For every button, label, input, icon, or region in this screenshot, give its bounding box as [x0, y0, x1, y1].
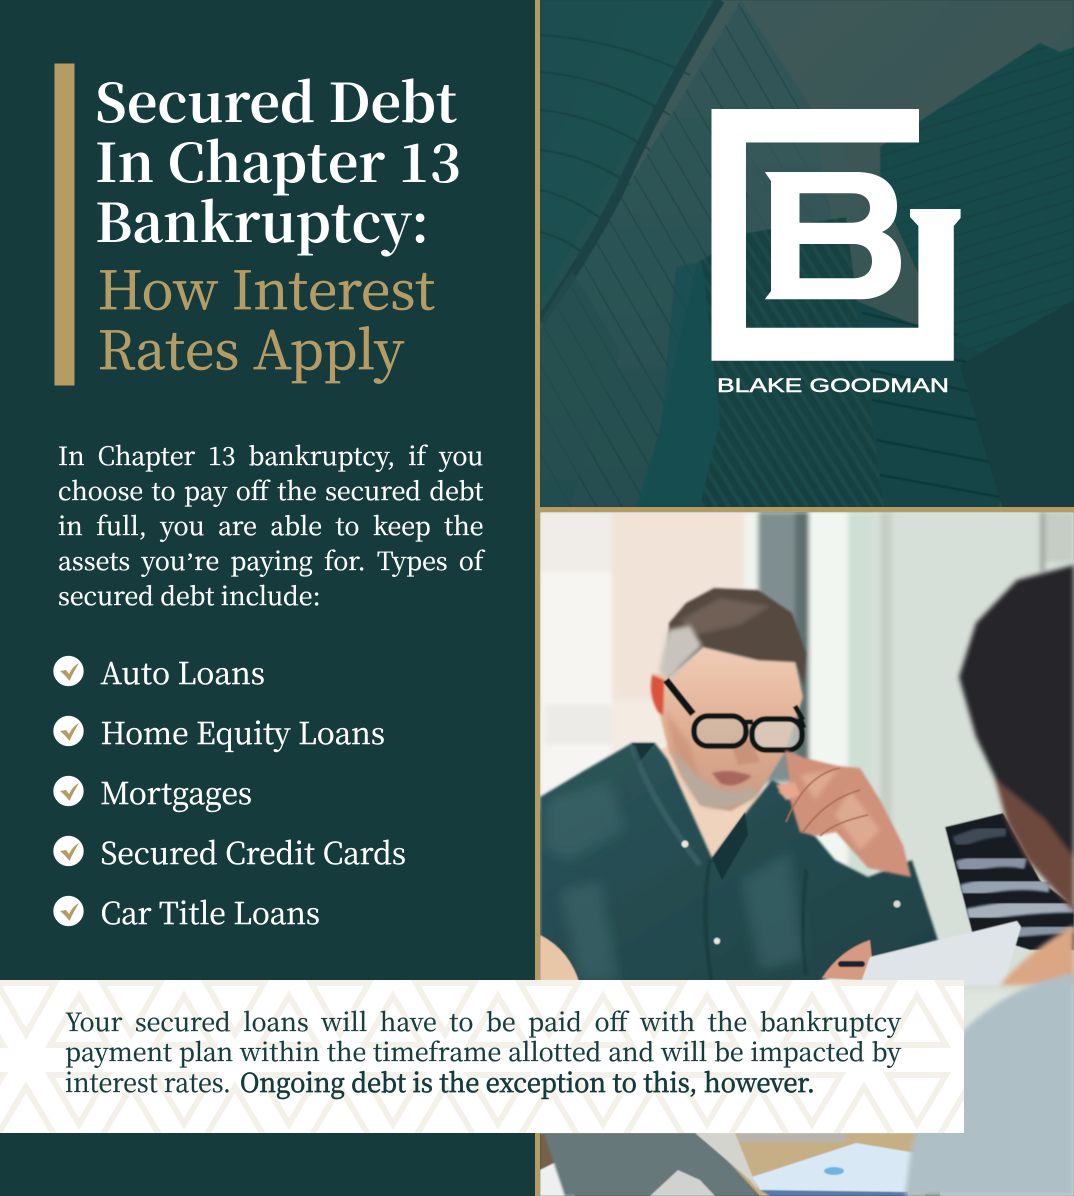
intro paragraph: in full, you are able to keep the — [58, 507, 484, 543]
banner last line: Ongoing debt is the exception to this, however. — [240, 1063, 815, 1100]
gold divider lines — [535, 0, 1074, 1196]
panel: white banner with triangle pattern — [0, 980, 997, 1136]
photo: person seen from behind — [959, 565, 1074, 912]
panel: left background — [0, 0, 535, 1196]
panel: office photo of man at meeting — [540, 512, 1074, 1196]
intro paragraph: assets you’re paying for. Types of — [58, 542, 484, 578]
man's hair — [668, 588, 806, 686]
subtitle: Rates Apply — [98, 309, 405, 385]
intro paragraph: secured debt include: — [58, 577, 321, 613]
man's glasses — [666, 680, 804, 750]
intro paragraph — [58, 437, 486, 613]
gold title bar — [54, 64, 74, 386]
photo: desk items — [540, 1133, 940, 1196]
banner last line: interest rates. — [65, 1063, 231, 1100]
item: mortgages: Mortgages — [100, 769, 252, 813]
title: Secured Debt — [95, 62, 457, 138]
title: Bankruptcy: — [95, 182, 429, 258]
man's shirt — [540, 743, 938, 985]
photo: person's shoulder — [905, 973, 1074, 1196]
photo: seated man — [540, 588, 938, 985]
item: auto loans: Auto Loans — [100, 649, 265, 693]
photo: chair — [945, 813, 1074, 950]
banner paragraph: payment plan within the timeframe allotted and will be impacted by — [65, 1033, 901, 1069]
intro paragraph: choose to pay off the secured debt — [58, 472, 484, 508]
banner paragraph: Your secured loans will have to be paid off with the bankruptcy — [65, 1003, 901, 1039]
logo wordmark: BLAKE GOODMAN — [717, 376, 949, 397]
item: home equity loans: Home Equity Loans — [100, 709, 385, 753]
subtitle: How Interest — [98, 249, 435, 325]
man's face — [652, 647, 803, 811]
photo: laptop — [860, 921, 1021, 985]
item: car title loans: Car Title Loans — [100, 889, 320, 933]
banner paragraph — [65, 1003, 902, 1069]
man's hand — [778, 750, 911, 877]
subtitle — [98, 249, 435, 385]
list: secured debt types — [54, 649, 406, 933]
panel: building photo — [540, 0, 1074, 507]
logo: Blake Goodman monogram — [712, 109, 961, 397]
title — [95, 62, 461, 258]
intro paragraph: In Chapter 13 bankruptcy, if you — [58, 437, 484, 473]
title: In Chapter 13 — [95, 122, 461, 198]
item: secured credit cards: Secured Credit Cards — [100, 829, 406, 873]
